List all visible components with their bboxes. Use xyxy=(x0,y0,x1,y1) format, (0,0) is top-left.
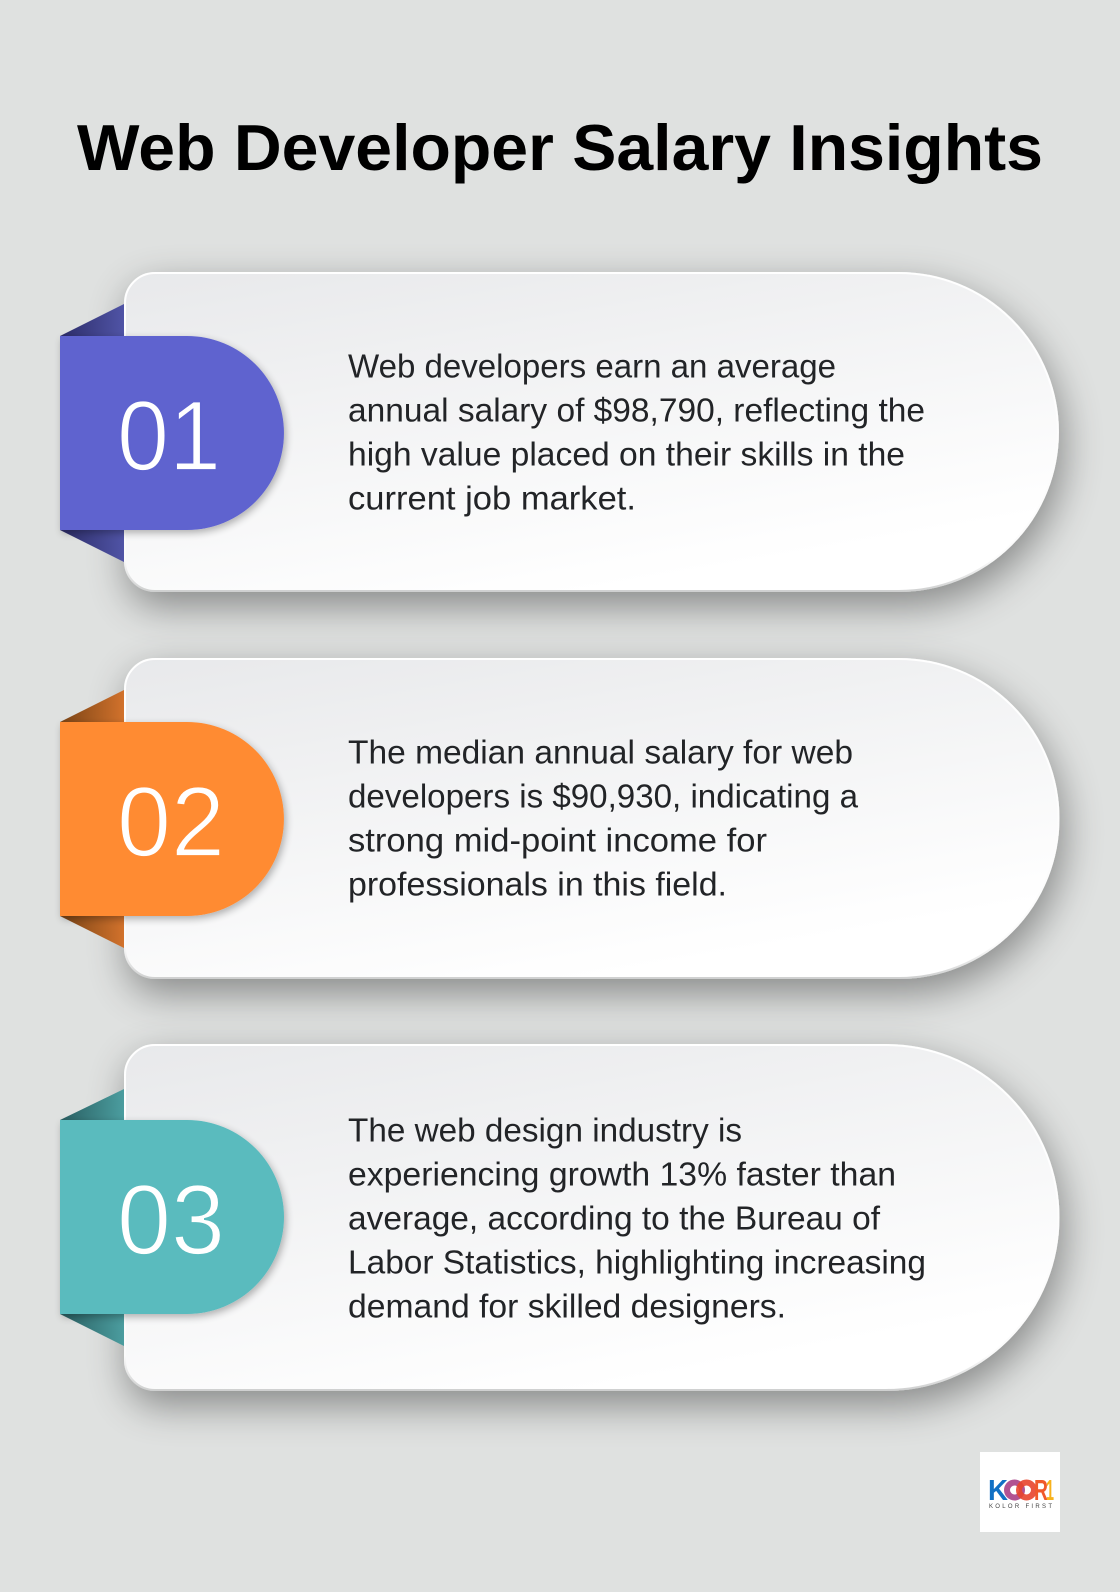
number 03: 03 xyxy=(117,1164,225,1275)
text block 1: Web developers earn an average xyxy=(348,348,836,384)
text block 1: annual salary of $98,790, reflecting the xyxy=(348,392,925,428)
text block 2: professionals in this field. xyxy=(348,866,727,902)
text block 2: strong mid-point income for xyxy=(348,822,767,858)
text block 3: demand for skilled designers. xyxy=(348,1288,786,1324)
fold: upper orange xyxy=(60,690,124,722)
text block 3: average, according to the Bureau of xyxy=(348,1200,881,1236)
card 3 body xyxy=(125,1045,1058,1390)
logo: Koor1: 1 xyxy=(1046,1475,1054,1507)
fold: lower teal xyxy=(60,1314,124,1346)
text block 1: high value placed on their skills in the xyxy=(348,436,905,472)
logo wordmark: R xyxy=(1034,1475,1048,1507)
badge 03 xyxy=(60,1120,284,1314)
text block 3: The web design industry is xyxy=(348,1112,742,1148)
logo: Koor1 xyxy=(980,1452,1060,1532)
fold: lower orange xyxy=(60,916,124,948)
fold: lower purple xyxy=(60,530,124,562)
logo background xyxy=(980,1452,1060,1532)
title: Web Developer Salary Insights xyxy=(77,111,1043,184)
card 2 body xyxy=(125,659,1058,978)
logo wordmark xyxy=(988,1475,1054,1507)
text block 2 xyxy=(348,734,859,902)
text block 3: experiencing growth 13% faster than xyxy=(348,1156,896,1192)
text block 1 xyxy=(348,348,925,516)
fold: upper purple xyxy=(60,304,124,336)
number 01: 01 xyxy=(117,380,221,491)
logo tagline: KOLOR FIRST xyxy=(989,1504,1052,1510)
badge 01 xyxy=(60,336,284,530)
text block 1: current job market. xyxy=(348,480,636,516)
fold: upper teal xyxy=(60,1089,124,1120)
text block 3 xyxy=(348,1112,926,1324)
number 02: 02 xyxy=(117,766,225,877)
text block 2: The median annual salary for web xyxy=(348,734,853,770)
panel: card 3 xyxy=(60,1045,1058,1390)
logo wordmark: K xyxy=(988,1475,1008,1507)
text block 3: Labor Statistics, highlighting increasing xyxy=(348,1244,926,1280)
badge 02 xyxy=(60,722,284,916)
panel: card 1 xyxy=(60,273,1058,591)
panel: card 2 xyxy=(60,659,1058,978)
text block 2: developers is $90,930, indicating a xyxy=(348,778,859,814)
card 1 body xyxy=(125,273,1058,591)
